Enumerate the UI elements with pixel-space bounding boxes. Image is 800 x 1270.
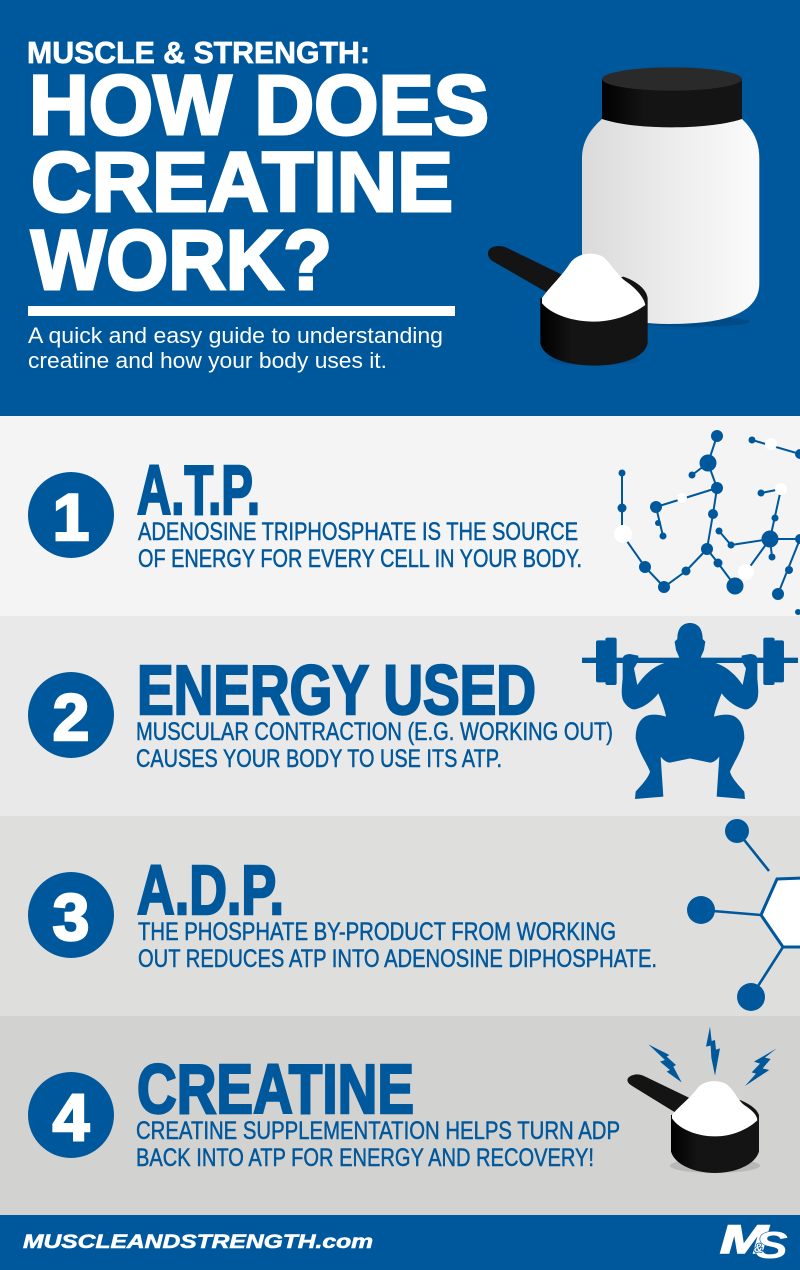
footer url: MUSCLEANDSTRENGTH.com <box>23 1231 373 1253</box>
body text energy used <box>136 718 613 773</box>
main title: CREATINE <box>31 135 453 229</box>
number badge 3 <box>28 872 114 958</box>
footer bar <box>0 1215 800 1270</box>
M&S logo: M <box>720 1218 770 1262</box>
panel: step 4 creatine <box>0 1016 800 1215</box>
icon: hexagon molecule <box>687 819 800 1011</box>
icon: molecule network <box>614 430 800 615</box>
number badge 1: 1 <box>53 480 89 554</box>
header panel <box>0 0 800 416</box>
panel: step 1 ATP <box>0 416 800 616</box>
number badge 4 <box>28 1072 114 1158</box>
M&S logo: S <box>755 1225 788 1267</box>
title kicker: MUSCLE & STRENGTH: <box>27 35 370 70</box>
subtitle <box>28 323 443 373</box>
number badge 3: 3 <box>53 880 89 954</box>
heading ADP: A.D.P. <box>137 851 284 929</box>
body text ADP <box>138 918 657 973</box>
body text creatine: BACK INTO ATP FOR ENERGY AND RECOVERY! <box>136 1144 594 1172</box>
subtitle: creatine and how your body uses it. <box>28 348 387 373</box>
subtitle: A quick and easy guide to understanding <box>28 323 443 348</box>
icon: scoop with energy bolts <box>627 1027 777 1173</box>
number badge 2 <box>28 672 114 758</box>
icon: creatine jar and scoop <box>488 67 759 366</box>
body text ATP: ADENOSINE TRIPHOSPHATE IS THE SOURCE <box>138 518 578 546</box>
main title <box>29 58 489 307</box>
body text ATP <box>138 518 582 573</box>
body text ADP: THE PHOSPHATE BY-PRODUCT FROM WORKING <box>138 918 616 946</box>
icon: squatting weightlifter <box>582 623 798 799</box>
heading ATP: A.T.P. <box>137 451 260 529</box>
body text energy used: CAUSES YOUR BODY TO USE ITS ATP. <box>136 745 502 773</box>
panel: step 3 ADP <box>0 816 800 1016</box>
body text ATP: OF ENERGY FOR EVERY CELL IN YOUR BODY. <box>138 545 582 573</box>
body text creatine: CREATINE SUPPLEMENTATION HELPS TURN ADP <box>136 1117 620 1145</box>
main title: HOW DOES <box>29 58 489 152</box>
title rule <box>28 306 455 316</box>
heading energy used: ENERGY USED <box>137 651 536 729</box>
body text energy used: MUSCULAR CONTRACTION (E.G. WORKING OUT) <box>136 718 613 746</box>
number badge 1 <box>28 472 114 558</box>
panel: step 2 energy used <box>0 616 800 816</box>
number badge 4: 4 <box>53 1080 90 1154</box>
body text ADP: OUT REDUCES ATP INTO ADENOSINE DIPHOSPHATE. <box>138 945 657 973</box>
body text creatine <box>136 1117 620 1172</box>
M&S logo: & <box>754 1241 763 1255</box>
main title: WORK? <box>31 213 332 307</box>
heading creatine: CREATINE <box>137 1050 414 1128</box>
M&S logo <box>720 1218 788 1267</box>
number badge 2: 2 <box>53 680 89 754</box>
